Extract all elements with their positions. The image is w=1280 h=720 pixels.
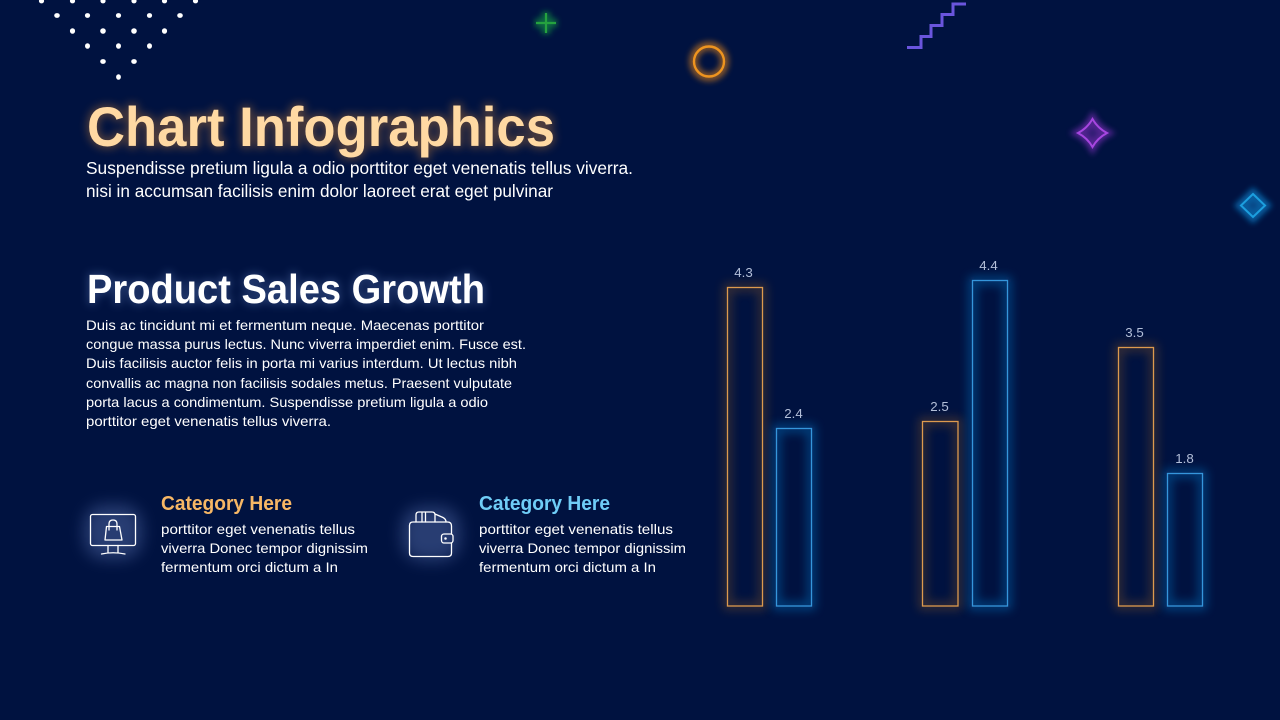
category 1: porttitor eget venenatis tellus [161,521,355,537]
category 1 [161,493,368,575]
body paragraph: congue massa purus lectus. Nunc viverra imperdiet enim. Fusce est. [86,336,526,352]
icon: orange circle [694,46,724,77]
icon: blue diamond [1241,194,1265,217]
category 2: viverra Donec tempor dignissim [479,540,686,556]
value labels: 3.5 [1125,325,1144,340]
bar group 2 [922,280,1008,606]
title: Chart Infographics [87,95,555,158]
bar group 1 [728,288,812,606]
bar group 3 [1118,348,1202,606]
section heading: Product Sales Growth [87,266,485,312]
body paragraph: Duis facilisis auctor felis in porta mi varius interdum. Ut lectus nibh [86,355,517,371]
icon: monitor with shopping bag [84,505,142,559]
body paragraph [86,317,526,429]
value labels: 1.8 [1175,451,1194,466]
value labels: 4.3 [734,265,753,280]
title: Chart Infographics [87,95,555,158]
category 2: porttitor eget venenatis tellus [479,521,673,537]
subtitle text [86,158,633,201]
category 1: Category Here [161,493,292,515]
decorative dot triangle [39,0,198,80]
value labels [734,258,1194,466]
value labels: 2.5 [930,399,949,414]
body paragraph: convallis ac magna non facilisis sodales metus. Praesent vulputate [86,375,512,391]
value labels: 2.4 [784,406,803,421]
subtitle text: Suspendisse pretium ligula a odio porttitor eget venenatis tellus viverra. [86,158,633,178]
category 2: fermentum orci dictum a In [479,559,656,575]
icon: purple stairs [907,4,966,48]
body paragraph: Duis ac tincidunt mi et fermentum neque. Maecenas porttitor [86,317,484,333]
category 2 [479,493,686,575]
value labels: 4.4 [979,258,998,273]
category 2: Category Here [479,493,610,515]
bar chart [728,258,1202,606]
body paragraph: porta lacus a condimentum. Suspendisse pretium ligula a odio [86,394,488,410]
icon: purple four-point star [1078,119,1107,147]
icon: wallet [402,507,460,561]
section heading: Product Sales Growth [87,266,485,312]
category 1: viverra Donec tempor dignissim [161,540,368,556]
icon: green plus [535,12,557,34]
category 1: fermentum orci dictum a In [161,559,338,575]
subtitle text: nisi in accumsan facilisis enim dolor laoreet erat eget pulvinar [86,181,553,201]
body paragraph: porttitor eget venenatis tellus viverra. [86,413,331,429]
